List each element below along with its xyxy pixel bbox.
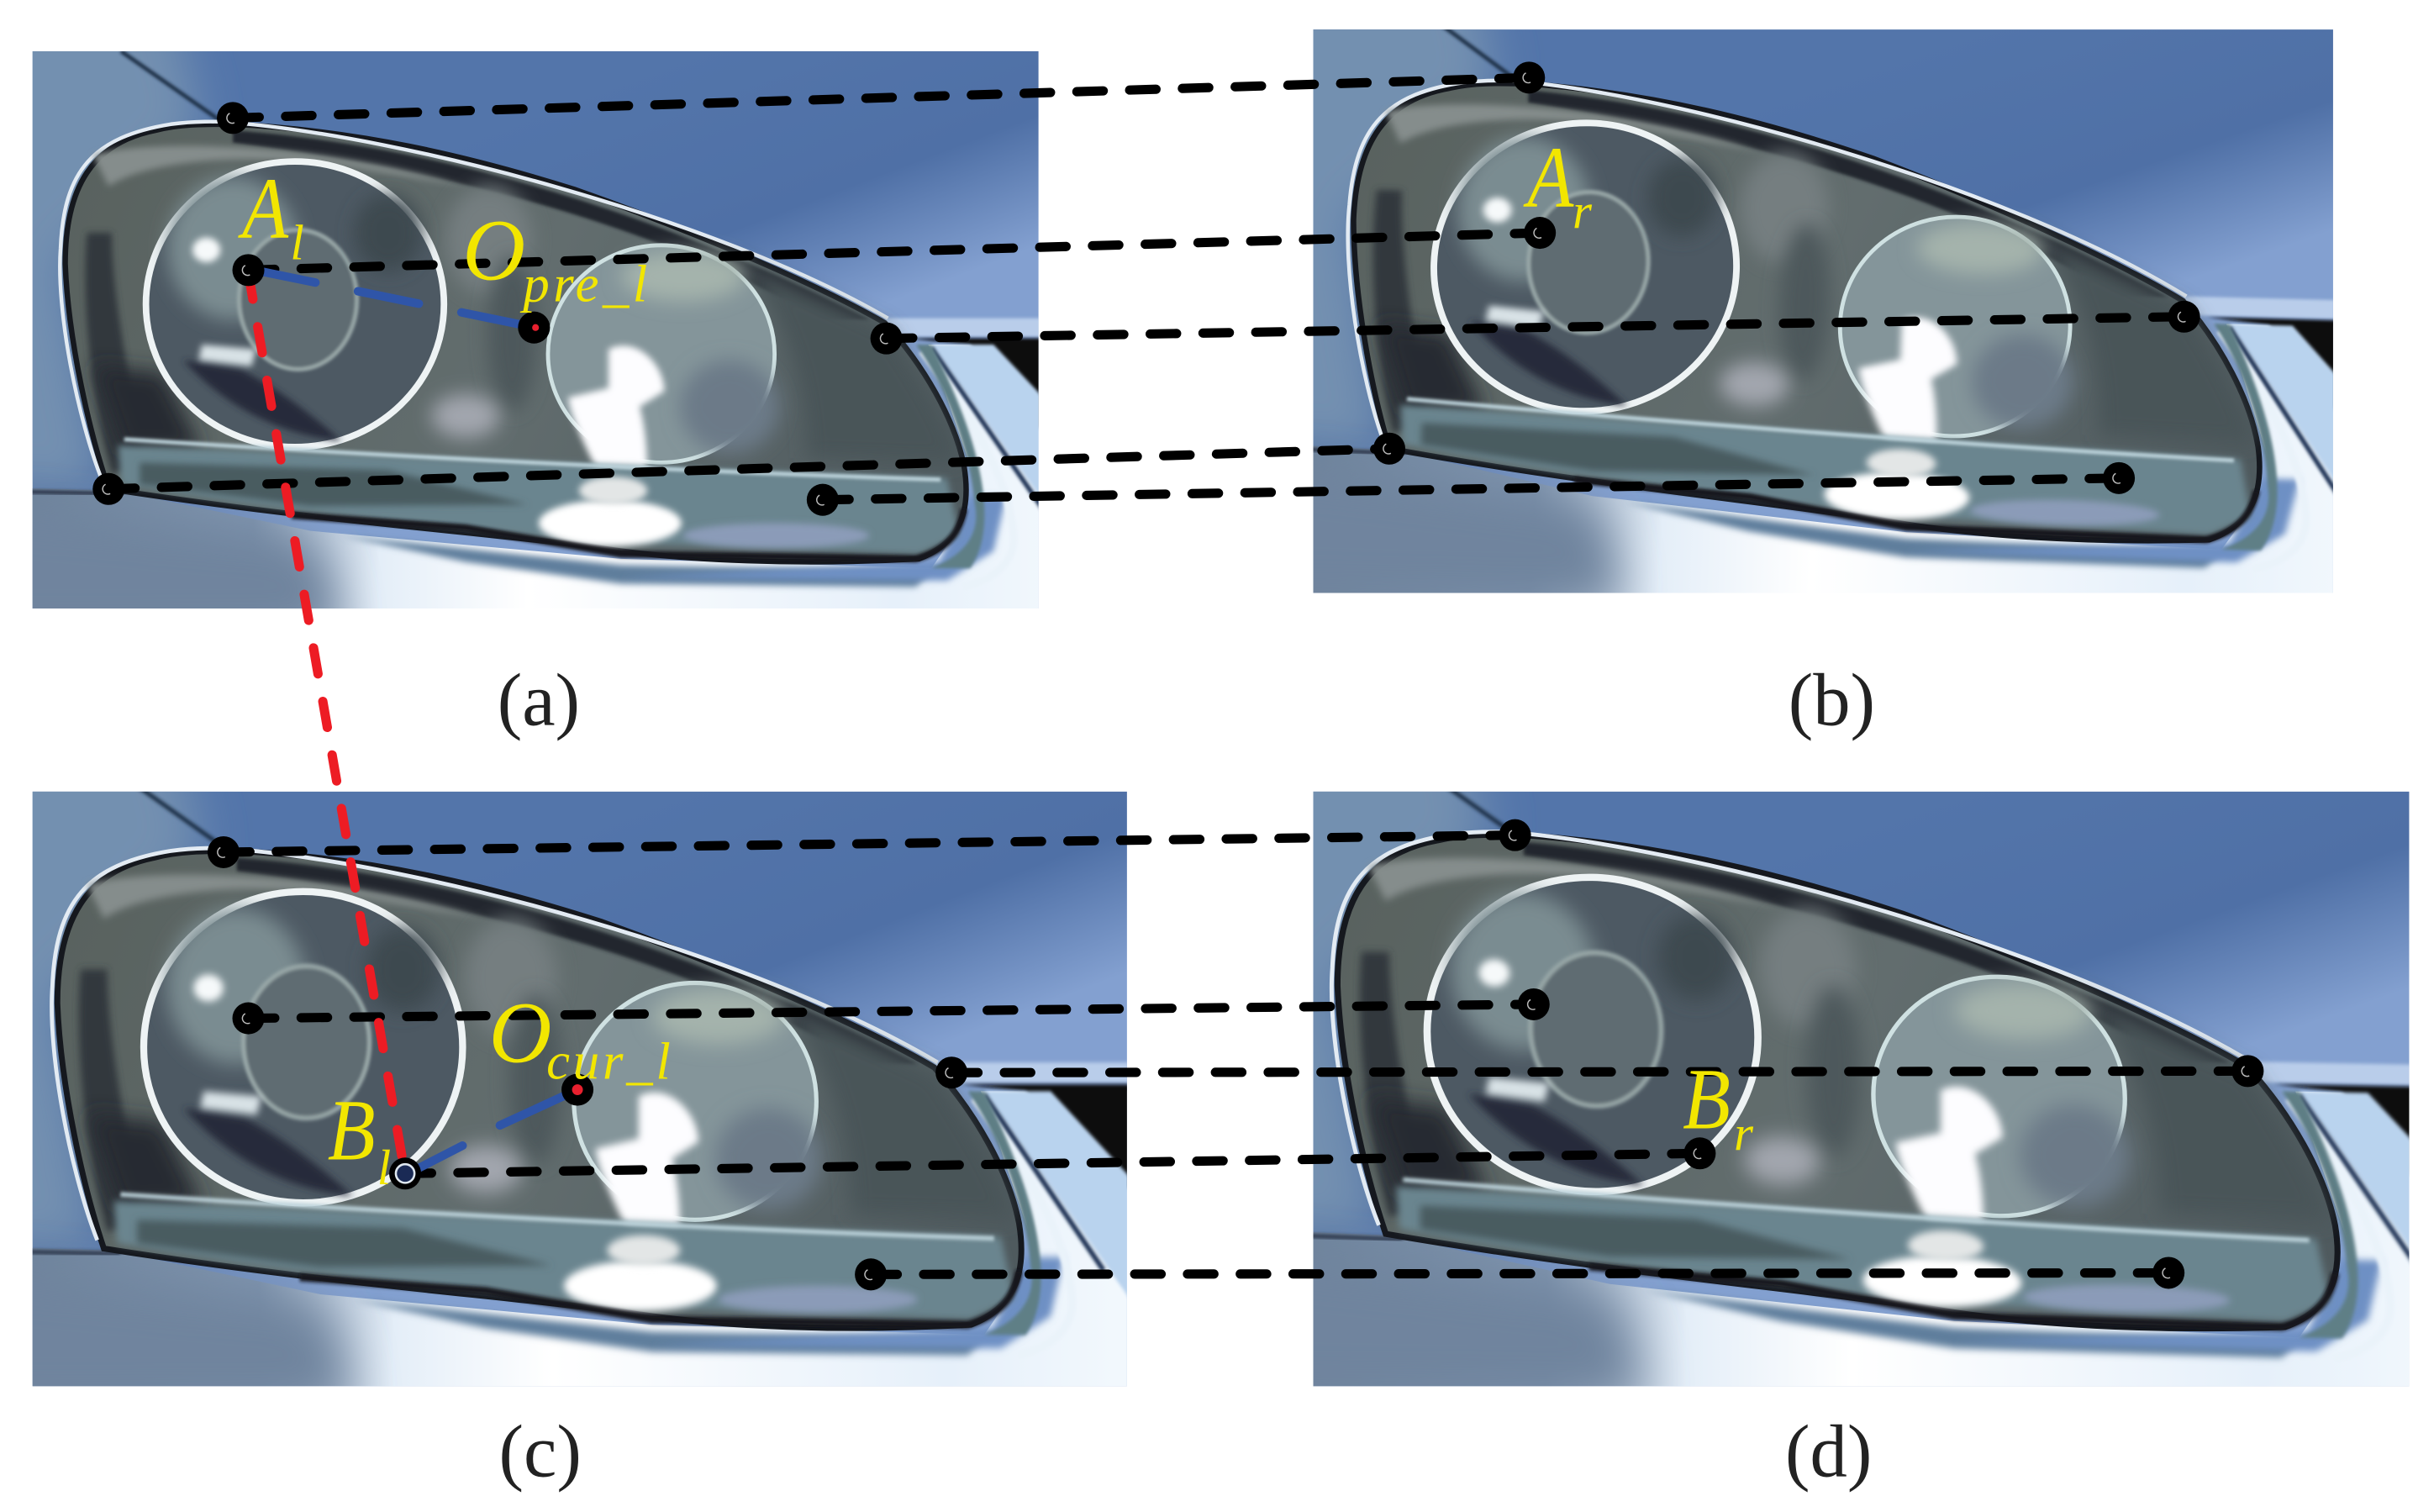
caption (b): (b) (1789, 660, 1875, 742)
label: A sub r: r (1573, 183, 1593, 239)
keypoint markers in panel (c) (208, 836, 967, 1290)
panel (a): left headlight, previous frame (32, 51, 1039, 608)
label: O sub pre_l: O (462, 203, 525, 298)
label: A sub l: l (290, 214, 304, 270)
caption (a): (a) (498, 660, 580, 742)
label: B sub r: B (1683, 1051, 1731, 1148)
blue dashed line from B_l to O_cur_l (405, 1090, 577, 1175)
panel (b): right headlight, previous frame (1313, 29, 2333, 593)
label: O sub pre_l (462, 203, 647, 313)
label: O sub cur_l (489, 985, 671, 1091)
panel (c): left headlight, current frame (32, 792, 1127, 1387)
keypoint markers in panel (a) (92, 102, 903, 516)
blue dashed line from A_l to O_pre_l (255, 270, 528, 326)
keypoint markers in panel (d) (1499, 819, 2263, 1289)
label: A sub r: A (1523, 129, 1574, 225)
caption (d): (d) (1785, 1410, 1872, 1493)
label: O sub cur_l: cur_l (546, 1032, 671, 1091)
label: A sub r (1523, 129, 1593, 239)
caption (c): (c) (499, 1410, 582, 1493)
label: B sub l: B (328, 1083, 376, 1179)
label: B sub l: l (377, 1140, 391, 1195)
keypoint markers in panel (b) (1373, 61, 2200, 494)
label: B sub r: r (1734, 1106, 1754, 1162)
label: B sub l (328, 1083, 391, 1195)
black dashed match lines between (a) and (b) (108, 77, 2184, 500)
label: A sub l: A (238, 161, 289, 256)
black dashed match lines between (c) and (d) (224, 835, 2247, 1274)
red dashed line from A_l to B_l (249, 273, 405, 1175)
label: A sub l (238, 161, 304, 270)
label: O sub cur_l: O (489, 985, 551, 1081)
panel (d): right headlight, current frame (1313, 792, 2409, 1387)
label: B sub r (1683, 1051, 1754, 1162)
label: O sub pre_l: pre_l (519, 254, 647, 313)
